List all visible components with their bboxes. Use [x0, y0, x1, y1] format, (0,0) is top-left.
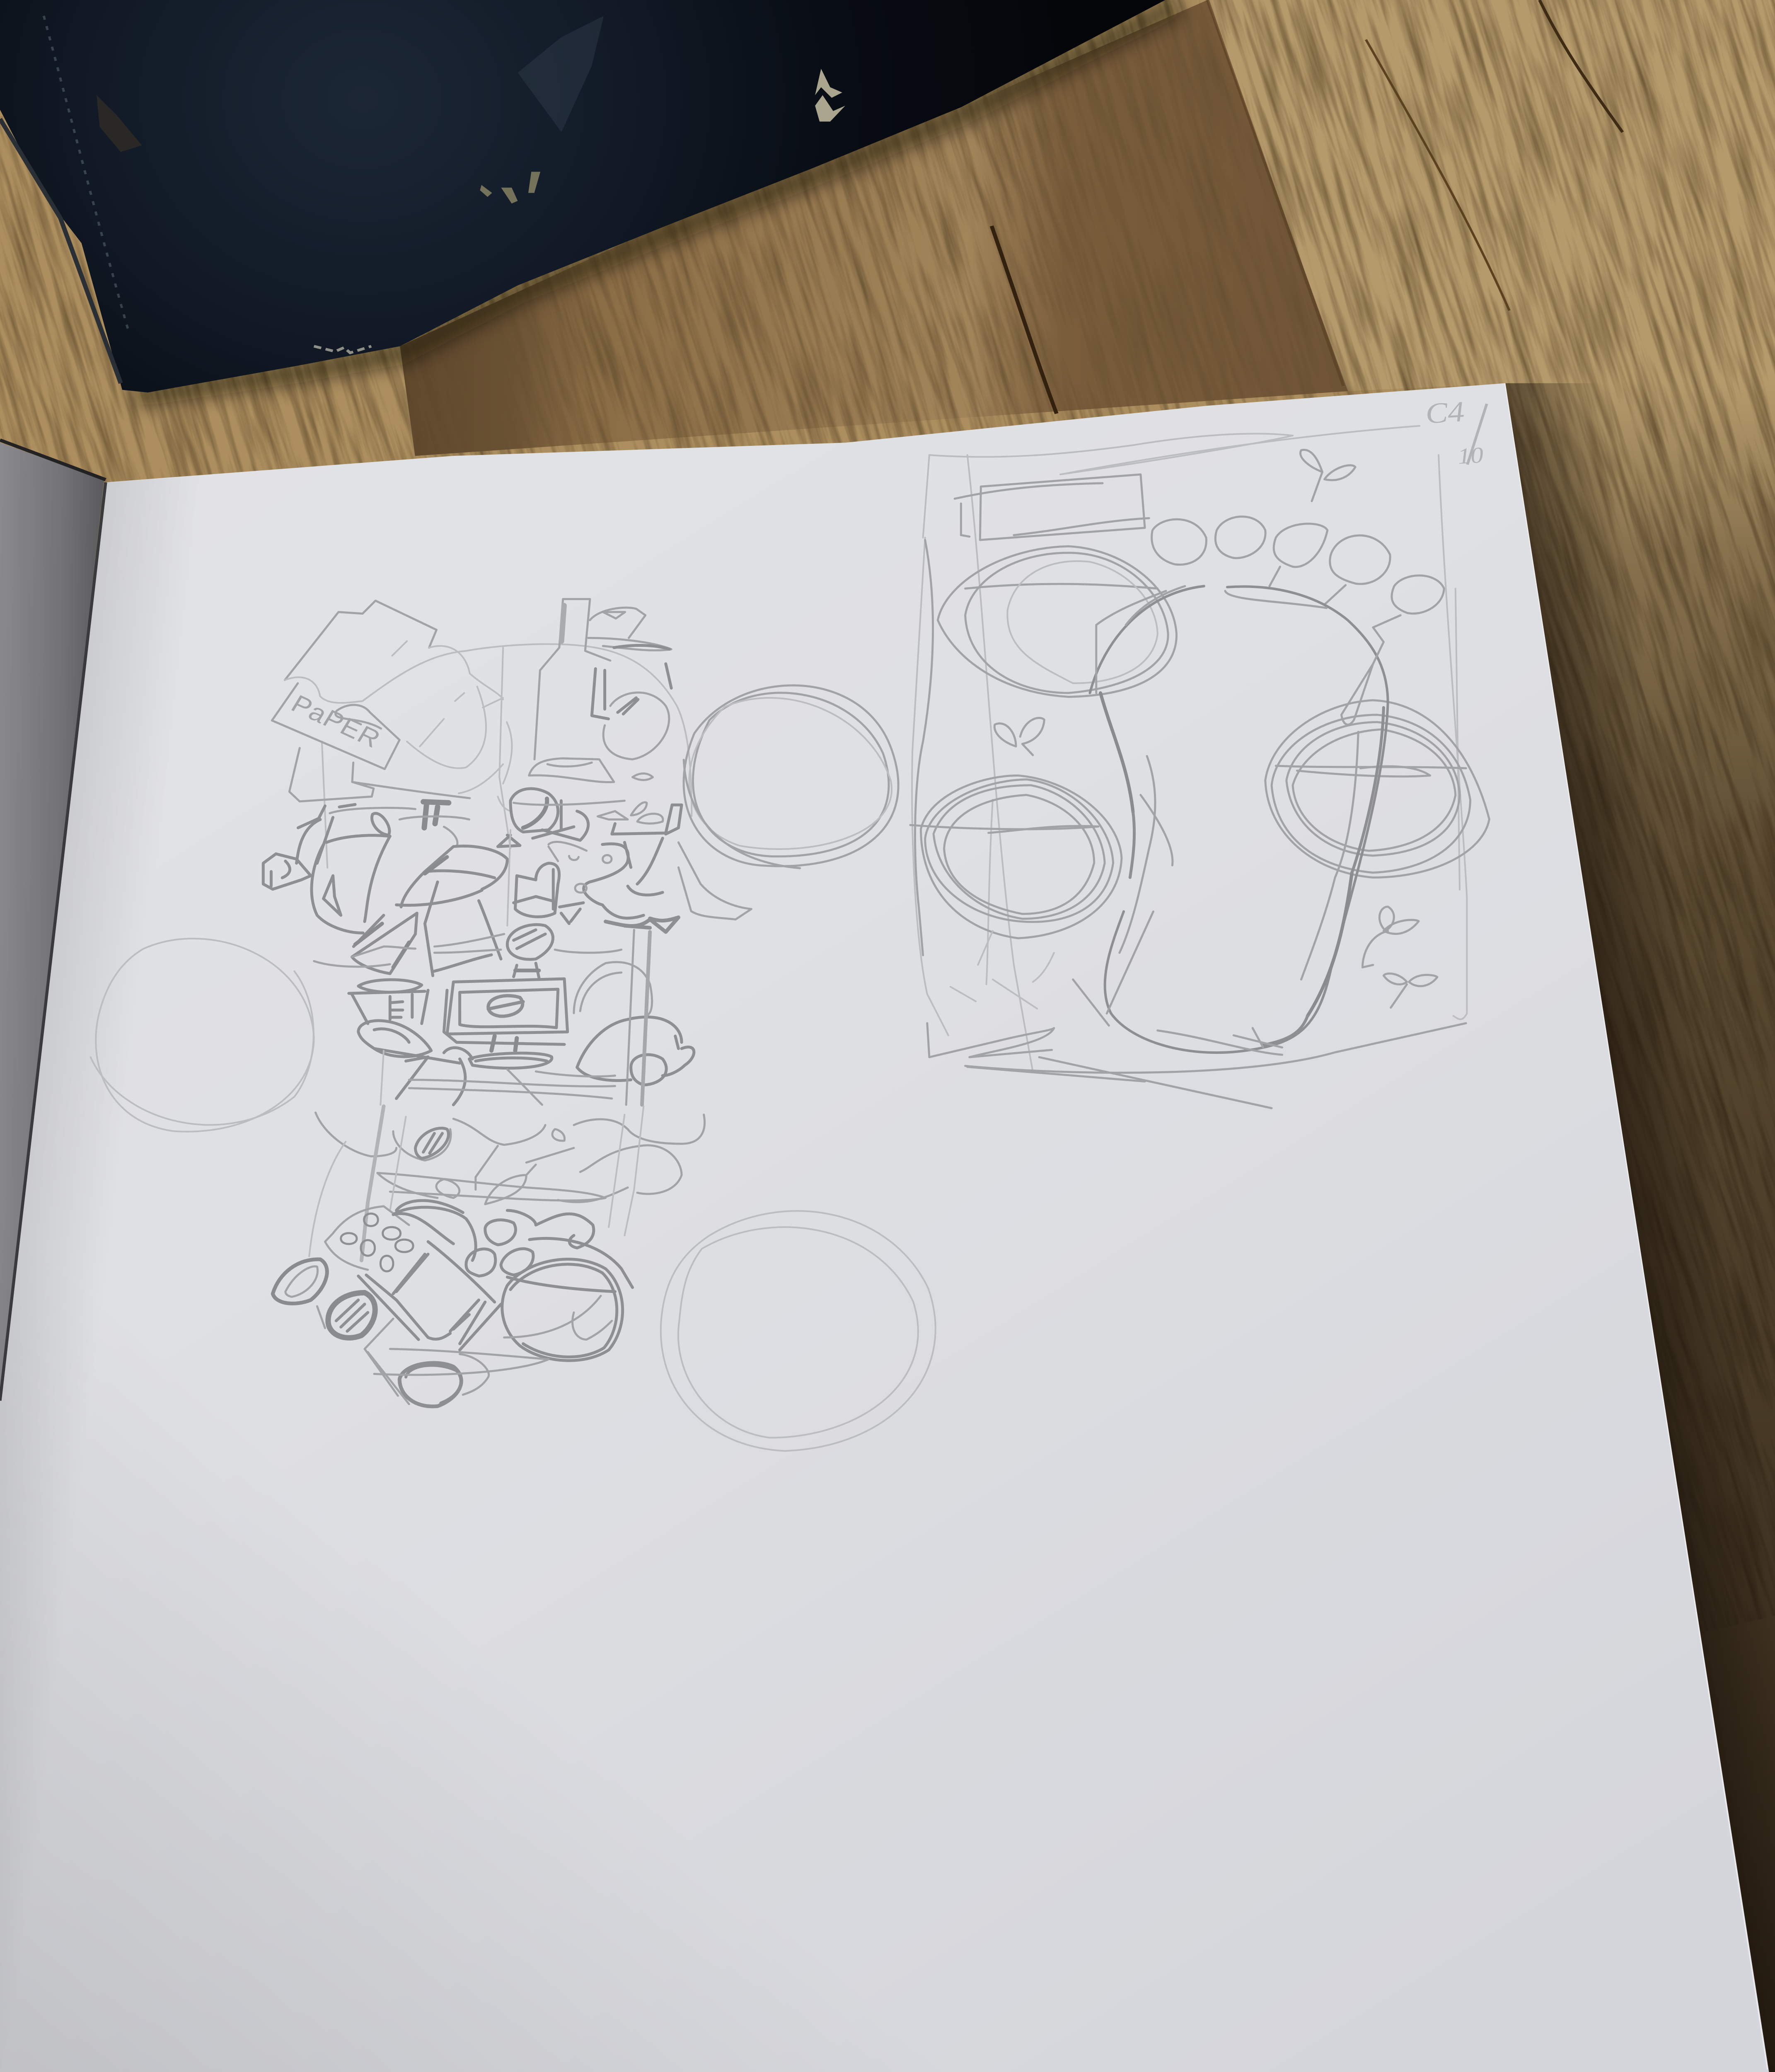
frame [929, 426, 1420, 474]
thumbnail sketch: product pile [263, 599, 751, 1406]
left page of the open sketchbook [0, 443, 104, 1401]
blank circle: upper right of pile [684, 685, 898, 868]
icon: small olive marks [480, 172, 540, 203]
left circle [910, 775, 1122, 938]
right circle [1265, 700, 1489, 878]
cast shadow of sketchbook on floor [1505, 383, 1775, 2072]
middle cluster [263, 789, 751, 1105]
toes [1152, 519, 1206, 565]
sprouts [1301, 450, 1355, 501]
top left circle [938, 546, 1177, 697]
small grass marks [950, 931, 1054, 1009]
paper sign lettering: PaPER [286, 690, 386, 753]
icon: chevron mark [815, 69, 845, 121]
dark navy bag with chevron pattern [0, 0, 1165, 392]
title box [955, 474, 1149, 540]
blank circle: left [91, 939, 314, 1132]
lower cluster: cloth, leaves, jars [273, 1106, 705, 1406]
paper bags, sign and bottle [272, 599, 692, 868]
handwritten page number: C4 [1424, 396, 1465, 430]
thumbnail sketch: foot composition [910, 426, 1489, 1108]
cast shadow of bag on floor [136, 5, 1177, 397]
handwritten page number [1424, 394, 1492, 471]
foot outline [1090, 586, 1388, 1053]
blank circle: lower right [661, 1211, 936, 1451]
handwritten page number: 10 [1457, 442, 1484, 469]
